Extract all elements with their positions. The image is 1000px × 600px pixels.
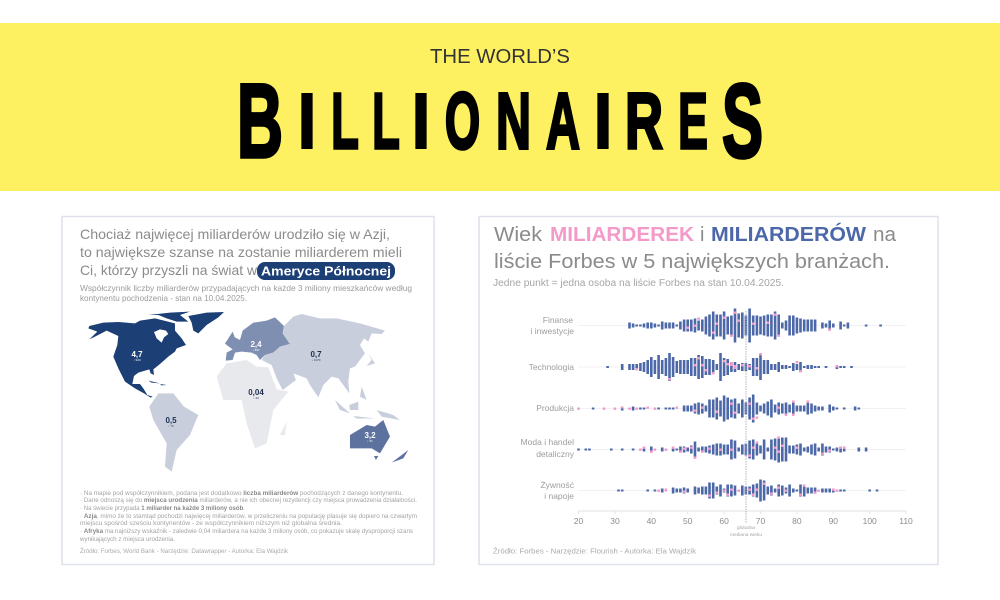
right heading: MILIARDERÓW	[711, 222, 866, 246]
explanatory notes: · Na mapie pod współczynnikiem, podana jest dodatkowo liczba miliarderów pochodzących z danego kontynentu.	[80, 490, 403, 497]
row: Produkcja	[578, 394, 859, 422]
map value labels: ↓ 71	[168, 424, 174, 428]
map value labels: ↓ 940	[133, 358, 141, 362]
explanatory notes: wynikających z miejsca urodzenia.	[79, 536, 175, 543]
Hudson Bay cut-out	[154, 329, 168, 343]
row labels: Technologia	[529, 362, 574, 372]
chart subtitle: Jedne punkt = jedna osoba na liście Forbes na stan 10.04.2025.	[493, 278, 784, 289]
main title: billionaires: E	[678, 76, 708, 166]
region: Africa	[217, 360, 288, 448]
map value labels: 4,7	[131, 350, 143, 359]
main title: billionaires: A	[546, 76, 580, 166]
explanatory notes: · Afryka ma najniższy wskaźnik - zaledwie 0,04 miliardera na każde 3 miliony osób, co pokazuje skalę dysproporcji szans	[80, 528, 413, 535]
row: Technologia	[608, 353, 852, 381]
main title: billionaires: B	[237, 63, 283, 180]
x axis labels: 90	[829, 516, 838, 526]
right heading: Wiek	[494, 224, 543, 246]
panel: world map of billionaires	[62, 216, 434, 564]
left source line: Źródło: Forbes, World Bank - Narzędzie: Datawrapper - Autorka: Ela Wajdzik	[80, 546, 289, 555]
row labels	[521, 315, 575, 501]
highlight: Ameryce Północnej: Ameryce Północnej	[261, 264, 391, 278]
choropleth world map	[88, 312, 408, 472]
region: Asia	[262, 314, 400, 420]
left heading: Chociaż najwięcej miliarderów urodziło się w Azji,	[80, 226, 390, 242]
left heading: to największe szanse na zostanie miliarderem mieli	[80, 244, 402, 260]
explanatory notes	[79, 490, 417, 543]
map value labels	[131, 340, 376, 443]
median annotation	[730, 525, 762, 538]
explanatory notes: · Dane odnoszą się do miejsca urodzenia miliarderów, a nie ich obecnej rezydencji czy miejsca prowadzenia działalności.	[80, 497, 417, 504]
global median line	[745, 311, 747, 523]
main title: billionaires: N	[496, 76, 531, 166]
region: Oceania	[350, 420, 408, 463]
main title: billionaires: I	[411, 76, 431, 166]
map value labels: ↓ 597	[252, 348, 260, 352]
main title: billionaires: O	[445, 76, 480, 165]
map value labels: 0,5	[165, 416, 177, 425]
x axis labels: 80	[792, 516, 802, 526]
x axis labels: 110	[899, 516, 913, 526]
explanatory notes: · Azja, mimo że to stamtąd pochodzi najwięcej miliarderów, w przeliczeniu na populację plasuje się dopiero na czwartym	[80, 513, 417, 520]
right heading	[494, 222, 897, 273]
map value labels: 0,04	[248, 388, 264, 397]
main title: billionaires: I	[593, 76, 613, 166]
map value labels: 2,4	[250, 340, 262, 349]
left heading: Ci, którzy przyszli na świat w	[80, 262, 258, 278]
region: South America	[149, 393, 198, 472]
right heading: liście Forbes w 5 największych branżach.	[494, 251, 890, 273]
map value labels: ↓ 1170	[312, 358, 321, 362]
subtitle: the world's: THE WORLD’S	[430, 46, 570, 68]
row labels: i napoje	[544, 491, 574, 501]
x axis labels	[574, 516, 913, 526]
row labels: Żywność	[540, 480, 575, 490]
x axis labels: 100	[863, 516, 877, 526]
left heading	[80, 226, 402, 278]
right heading: MILIARDEREK	[550, 224, 695, 246]
map subtitle: kontynentu pochodzenia - stan na 10.04.2025.	[80, 293, 247, 303]
right source line: Źródło: Forbes - Narzędzie: Flourish - Autorka: Ela Wajdzik	[493, 546, 696, 556]
row labels: Finanse	[543, 315, 573, 325]
map value labels: 0,7	[310, 350, 322, 359]
row: Żywność i napoje	[618, 480, 877, 502]
map value labels: 3,2	[364, 431, 376, 440]
row labels: i inwestycje	[531, 326, 574, 336]
main title: billionaires: I	[297, 76, 317, 166]
row labels: detaliczny	[536, 449, 575, 459]
row: Moda i handel detaliczny	[578, 436, 866, 462]
title banner	[0, 23, 1000, 191]
x axis labels: 20	[574, 516, 583, 526]
main title: billionaires: R	[625, 76, 663, 166]
x axis labels: 60	[719, 516, 729, 526]
map subtitle	[80, 283, 412, 303]
median annotation: globalna	[737, 525, 755, 531]
row labels: Produkcja	[536, 403, 574, 413]
panel: age beeswarm chart	[479, 216, 938, 564]
main title: billionaires: L	[372, 76, 400, 166]
right heading: na	[873, 224, 897, 246]
row labels: Moda i handel	[521, 437, 574, 447]
region: Europe	[225, 317, 290, 361]
map value labels: ↓ 51	[367, 439, 373, 443]
main title: billionaires: S	[722, 63, 763, 180]
main title: billionaires: L	[331, 76, 359, 166]
row: Finanse i inwestycje	[630, 308, 881, 342]
x axis labels: 40	[647, 516, 656, 526]
x axis labels: 50	[683, 516, 693, 526]
region: North America	[88, 312, 224, 398]
explanatory notes: miejscu spośród sześciu kontynentów - ze współczynnikiem niższym niż globalna średnia.	[80, 520, 342, 527]
row baselines and axis	[578, 326, 906, 514]
right heading: i	[700, 224, 704, 246]
median annotation: mediana wieku	[730, 532, 762, 538]
map subtitle: Współczynnik liczby miliarderów przypadających na każde 3 miliony mieszkańców według	[80, 283, 412, 293]
explanatory notes: · Na świecie przypada 1 miliarder na każde 3 miliony osób.	[80, 505, 245, 512]
main title: billionaires	[237, 63, 763, 180]
x axis labels: 30	[610, 516, 620, 526]
map value labels: ↓ 20	[253, 396, 259, 400]
x axis labels: 70	[756, 516, 765, 526]
